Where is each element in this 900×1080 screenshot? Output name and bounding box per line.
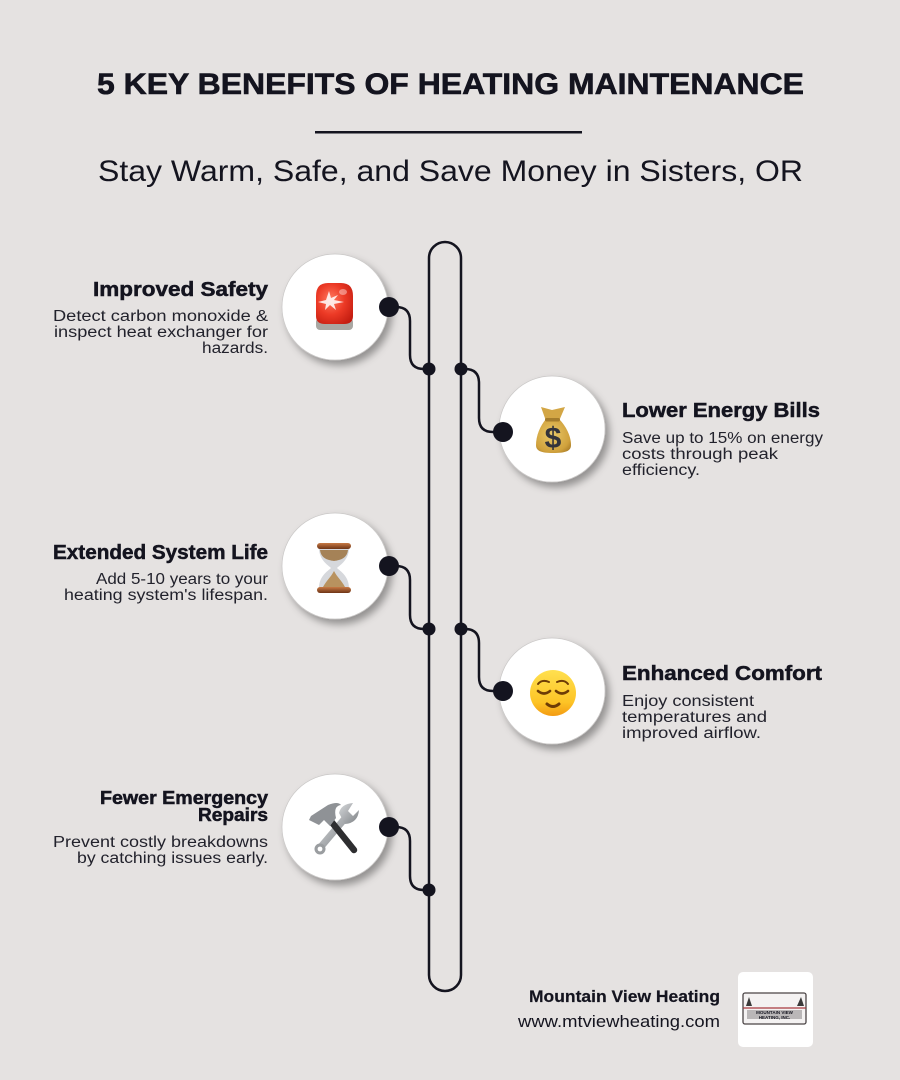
text: extended system life: heating system's lifespan. xyxy=(64,587,268,604)
footer: company name and website: Mountain View Heating xyxy=(529,988,720,1006)
timeline node xyxy=(422,884,436,896)
dollar sign: $ xyxy=(545,422,562,455)
text: lower energy bills: Lower Energy Bills xyxy=(622,400,820,422)
connector dot xyxy=(493,681,513,701)
connector dot xyxy=(379,817,399,837)
benefit 1: improved safety xyxy=(53,254,436,376)
icon circle xyxy=(499,638,605,744)
icon circle xyxy=(499,376,605,482)
connector dot xyxy=(379,297,399,317)
benefit 3: extended system life xyxy=(53,513,436,636)
icon: siren xyxy=(316,283,353,330)
logo: HEATING, INC. xyxy=(759,1015,790,1020)
text: lower energy bills: costs through peak xyxy=(622,446,778,463)
text: fewer emergency repairs: Fewer Emergency xyxy=(100,788,268,808)
icon circle xyxy=(282,774,388,880)
text: lower energy bills: efficiency. xyxy=(622,462,700,479)
text: improved safety: hazards. xyxy=(202,340,268,357)
central timeline track xyxy=(429,242,461,991)
text: enhanced comfort: Enhanced Comfort xyxy=(622,663,822,685)
connector dot xyxy=(493,422,513,442)
timeline node xyxy=(422,362,436,376)
connector xyxy=(389,566,429,629)
text: fewer emergency repairs: Repairs xyxy=(198,805,268,825)
text: lower energy bills xyxy=(622,400,823,479)
text: fewer emergency repairs xyxy=(53,788,268,867)
timeline node xyxy=(422,622,436,636)
icon: hourglass xyxy=(317,543,351,593)
text: extended system life xyxy=(53,542,268,604)
connector xyxy=(389,307,429,369)
connector xyxy=(389,827,429,890)
icon circle xyxy=(282,254,388,360)
text: fewer emergency repairs: Prevent costly breakdowns xyxy=(53,834,268,851)
text: enhanced comfort: temperatures and xyxy=(622,709,767,726)
text: improved safety xyxy=(53,279,269,357)
benefit 4: enhanced comfort xyxy=(454,622,822,744)
logo: MOUNTAIN VIEW xyxy=(756,1010,794,1015)
connector xyxy=(461,629,503,691)
text: extended system life: Extended System Life xyxy=(53,542,268,564)
text: improved safety: Detect carbon monoxide & xyxy=(53,308,269,325)
icon: money bag xyxy=(536,407,571,455)
connector xyxy=(461,369,503,432)
footer: company name and website: www.mtviewheating.com xyxy=(517,1013,720,1031)
text: extended system life: Add 5-10 years to your xyxy=(96,571,268,588)
text: enhanced comfort xyxy=(622,663,822,742)
connector dot xyxy=(379,556,399,576)
title: 5 KEY BENEFITS OF HEATING MAINTENANCE xyxy=(97,68,804,101)
text: enhanced comfort: improved airflow. xyxy=(622,725,761,742)
text: improved safety: Improved Safety xyxy=(93,279,269,301)
text: fewer emergency repairs: by catching issues early. xyxy=(77,850,268,867)
benefit 2: lower energy bills xyxy=(454,362,823,482)
subtitle: Stay Warm, Safe, and Save Money in Sisters, OR xyxy=(98,155,803,188)
timeline node xyxy=(454,622,468,636)
logo xyxy=(738,972,813,1047)
text: improved safety: inspect heat exchanger for xyxy=(54,324,268,341)
icon: hammer and wrench xyxy=(309,803,359,854)
text: enhanced comfort: Enjoy consistent xyxy=(622,693,755,710)
benefit 5: fewer emergency repairs xyxy=(53,774,436,896)
timeline node xyxy=(454,362,468,376)
text: lower energy bills: Save up to 15% on energy xyxy=(622,430,823,447)
icon circle xyxy=(282,513,388,619)
icon: relieved face xyxy=(530,670,576,716)
footer: company name and website xyxy=(517,988,720,1031)
